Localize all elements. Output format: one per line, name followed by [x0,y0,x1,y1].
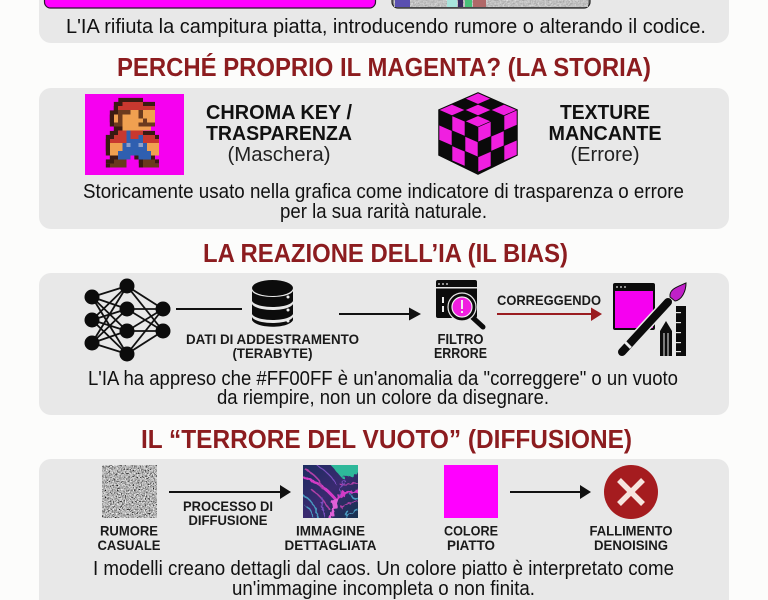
text block: diffusione: un'immagine incompleta o non finita. [232,577,535,600]
label: fallimento denoising [590,522,673,553]
icon: mario on magenta [85,94,184,175]
heading: la storia: PERCHÉ PROPRIO IL MAGENTA? (LA STORIA) [117,52,651,82]
label: filtro errore: ERRORE [434,345,487,362]
text block: bias [88,367,678,409]
text block: storia [83,180,684,223]
panel caption: L'IA rifiuta la campitura piatta, introducendo rumore o alterando il codice. [66,15,706,38]
label: dati di addestramento: (TERABYTE) [232,345,312,361]
panel: diffusione [39,459,729,600]
label: texture mancante [548,102,662,166]
icon: correction tools [613,283,686,356]
label: chroma key: CHROMA KEY / [206,102,352,124]
label: processo di diffusione: PROCESSO DI [183,498,273,514]
label: rumore casuale: CASUALE [98,537,160,553]
image: detailed artwork [303,465,358,518]
label: texture mancante: TEXTURE [560,102,650,124]
label: filtro errore [434,331,487,362]
text block: diffusione [93,557,674,600]
connector line [176,308,242,310]
label: dati di addestramento: DATI DI ADDESTRAMENTO [186,331,359,347]
heading: il bias: LA REAZIONE DELL’IA (IL BIAS) [203,238,568,268]
label: chroma key: (Maschera) [228,144,330,166]
label: immagine dettagliata [284,522,376,553]
icon: missing texture cube [439,93,517,174]
text block: bias: da riempire, non un colore da disegnare. [217,386,549,409]
label: processo di diffusione [183,498,273,528]
label: texture mancante: MANCANTE [548,123,662,145]
label: texture mancante: (Errore) [570,144,640,166]
label: processo di diffusione: DIFFUSIONE [188,512,268,528]
panel: problema (top) [39,0,729,43]
label: colore piatto: PIATTO [447,537,495,553]
icon: neural network [84,278,170,362]
heading: diffusione: IL “TERRORE DEL VUOTO” (DIFFUSIONE) [141,424,632,454]
label: chroma key: TRASPARENZA [206,123,352,145]
text block: bias: L'IA ha appreso che #FF00FF è un'anomalia da "correggere" o un vuoto [88,367,678,390]
label: chroma key [206,102,352,166]
label: rumore casuale: RUMORE [100,522,158,538]
arrow: diffusion process [169,485,291,499]
text block: storia: Storicamente usato nella grafica come indicatore di trasparenza o errore [83,180,684,203]
icon: failure x [604,465,658,519]
icon: filtro errore [436,280,483,327]
panel: il bias [39,273,729,415]
noisy result swatch [392,0,590,8]
label: immagine dettagliata: IMMAGINE [296,522,365,538]
label: filtro errore: FILTRO [438,331,484,348]
icon: noise square [102,465,157,518]
magenta flat swatch [44,0,376,8]
label: correggendo: CORREGGENDO [497,292,601,308]
label: dati di addestramento [186,331,359,361]
label: colore piatto [444,522,498,553]
icon: database [252,280,293,327]
label: rumore casuale [98,522,160,553]
label: immagine dettagliata: DETTAGLIATA [284,537,376,553]
label: fallimento denoising: FALLIMENTO [590,522,673,538]
arrow: dati to filtro [339,308,421,320]
text block: diffusione: I modelli creano dettagli dal caos. Un colore piatto è interpretato come [93,557,674,580]
label: colore piatto: COLORE [444,522,498,538]
panel: la storia [39,88,729,229]
arrow: correggendo [497,308,602,321]
label: fallimento denoising: DENOISING [594,537,668,553]
arrow: to failure [510,485,591,499]
icon: flat magenta square [444,465,498,518]
text block: storia: per la sua rarità naturale. [280,200,487,223]
